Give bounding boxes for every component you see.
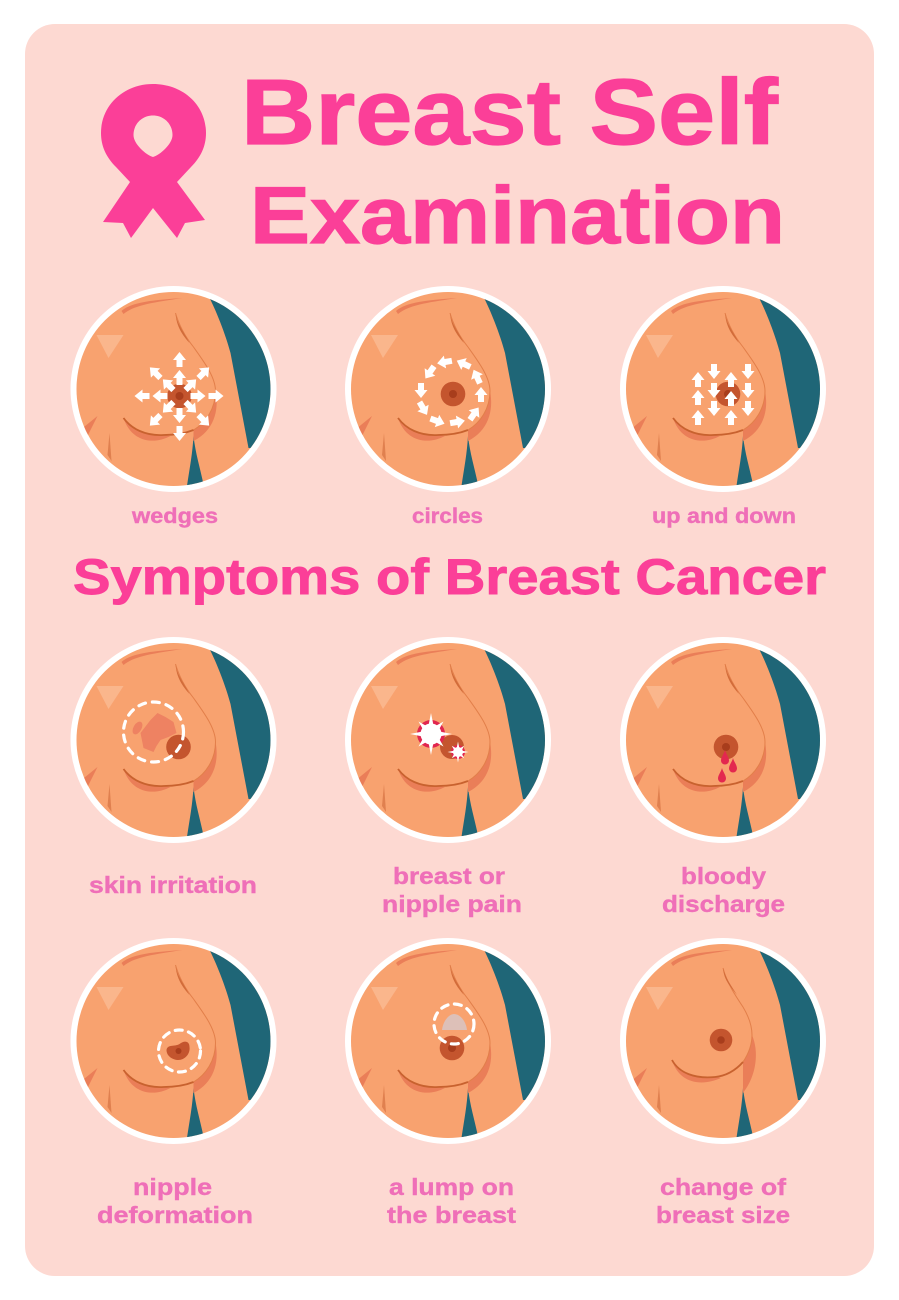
dashed highlight circle — [124, 702, 184, 762]
arrows: vertical strip pattern — [692, 364, 754, 425]
label: breast or nipple pain: breast or — [393, 863, 505, 889]
label: nipple deformation: nipple — [133, 1174, 212, 1200]
arrows: radial wedge pattern — [134, 352, 224, 441]
dashed highlight circle — [434, 1004, 474, 1044]
label: skin irritation: skin irritation — [89, 872, 257, 898]
panel: change of breast size — [620, 938, 833, 1144]
irritated skin patch — [131, 713, 176, 752]
label: change of breast size: change of — [660, 1174, 786, 1200]
panel: circles — [345, 286, 558, 492]
label: a lump on the breast — [387, 1174, 516, 1228]
pain burst: small — [448, 742, 468, 762]
blood drops — [718, 750, 737, 782]
label: change of breast size — [656, 1174, 790, 1228]
label: nipple deformation: deformation — [97, 1202, 253, 1228]
icon: pink awareness ribbon — [101, 84, 206, 238]
smaller breast outline — [672, 968, 756, 1093]
pain burst: large — [410, 713, 452, 755]
label: breast or nipple pain — [382, 863, 522, 917]
panel: up and down — [620, 286, 833, 492]
label: breast or nipple pain: nipple pain — [382, 891, 522, 917]
nipple — [710, 1029, 732, 1051]
label: bloody discharge: bloody — [681, 863, 766, 889]
label: a lump on the breast: a lump on — [389, 1174, 514, 1200]
label: nipple deformation — [97, 1174, 253, 1228]
label: circles: circles — [412, 505, 483, 528]
label: bloody discharge: discharge — [662, 891, 785, 917]
title — [241, 60, 785, 261]
title: Breast Self — [241, 60, 779, 164]
label: bloody discharge — [662, 863, 785, 917]
title: Examination — [250, 171, 785, 261]
panel: skin irritation — [70, 637, 284, 843]
nipple — [166, 735, 191, 759]
dashed highlight circle — [158, 1030, 200, 1072]
panel: bloody discharge — [620, 637, 833, 843]
label: a lump on the breast: the breast — [387, 1202, 516, 1228]
arrows: circular pattern — [414, 354, 488, 430]
label: change of breast size: breast size — [656, 1202, 790, 1228]
panel: breast or nipple pain — [345, 637, 558, 843]
label: up and down: up and down — [652, 505, 796, 528]
deformed nipple — [166, 1042, 190, 1060]
label: wedges: wedges — [131, 505, 218, 528]
panel: nipple deformation — [70, 938, 284, 1144]
heading: symptoms: Symptoms of Breast Cancer — [73, 549, 826, 605]
areola — [440, 735, 464, 759]
panel: a lump on the breast — [345, 938, 558, 1144]
panel: wedges — [70, 286, 284, 492]
lump — [442, 1014, 467, 1030]
